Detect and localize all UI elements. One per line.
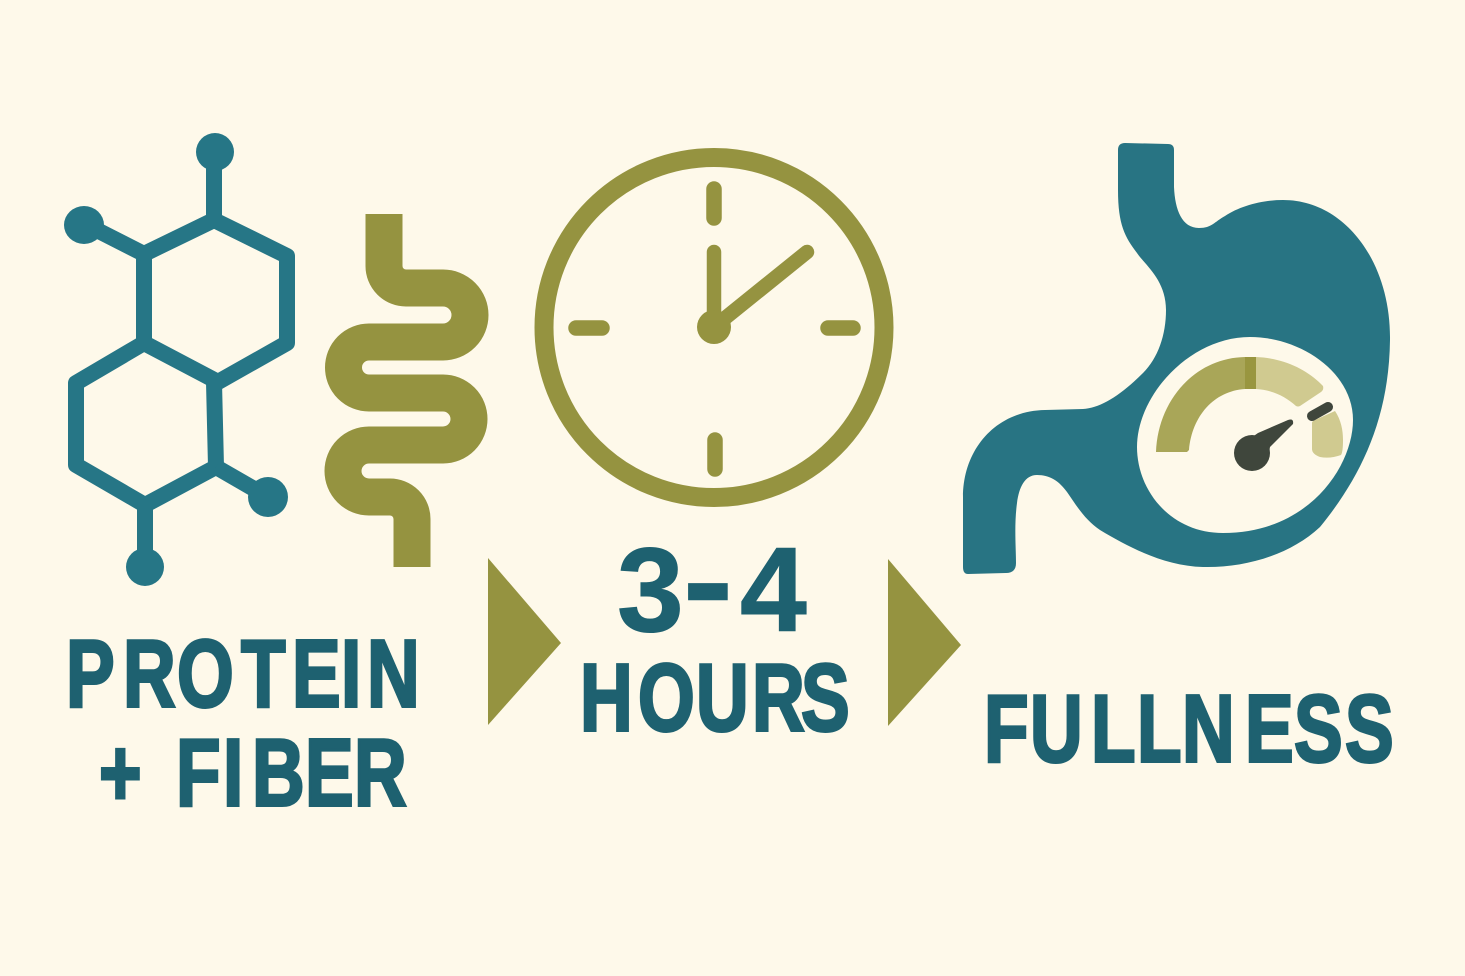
label: 3-4 hours: 3	[617, 523, 684, 657]
label: 3-4 hours: 4	[740, 523, 807, 657]
icon: intestine	[343, 214, 470, 567]
icon: stomach with gauge	[963, 143, 1390, 574]
label: fullness: FULLNESS	[984, 676, 1394, 783]
icon: clock	[544, 158, 884, 498]
label: 3-4 hours	[580, 499, 850, 752]
label: protein plus fiber: PROTEIN	[66, 621, 420, 728]
label: 3-4 hours: -	[682, 499, 734, 660]
gauge	[1156, 357, 1343, 471]
arrow: first	[488, 558, 561, 725]
label: protein plus fiber	[66, 621, 420, 827]
icon: molecule	[64, 133, 288, 586]
arrow: second	[888, 559, 961, 726]
label: protein plus fiber: +FIBER	[99, 720, 407, 827]
label: 3-4 hours: HOURS	[580, 645, 850, 752]
